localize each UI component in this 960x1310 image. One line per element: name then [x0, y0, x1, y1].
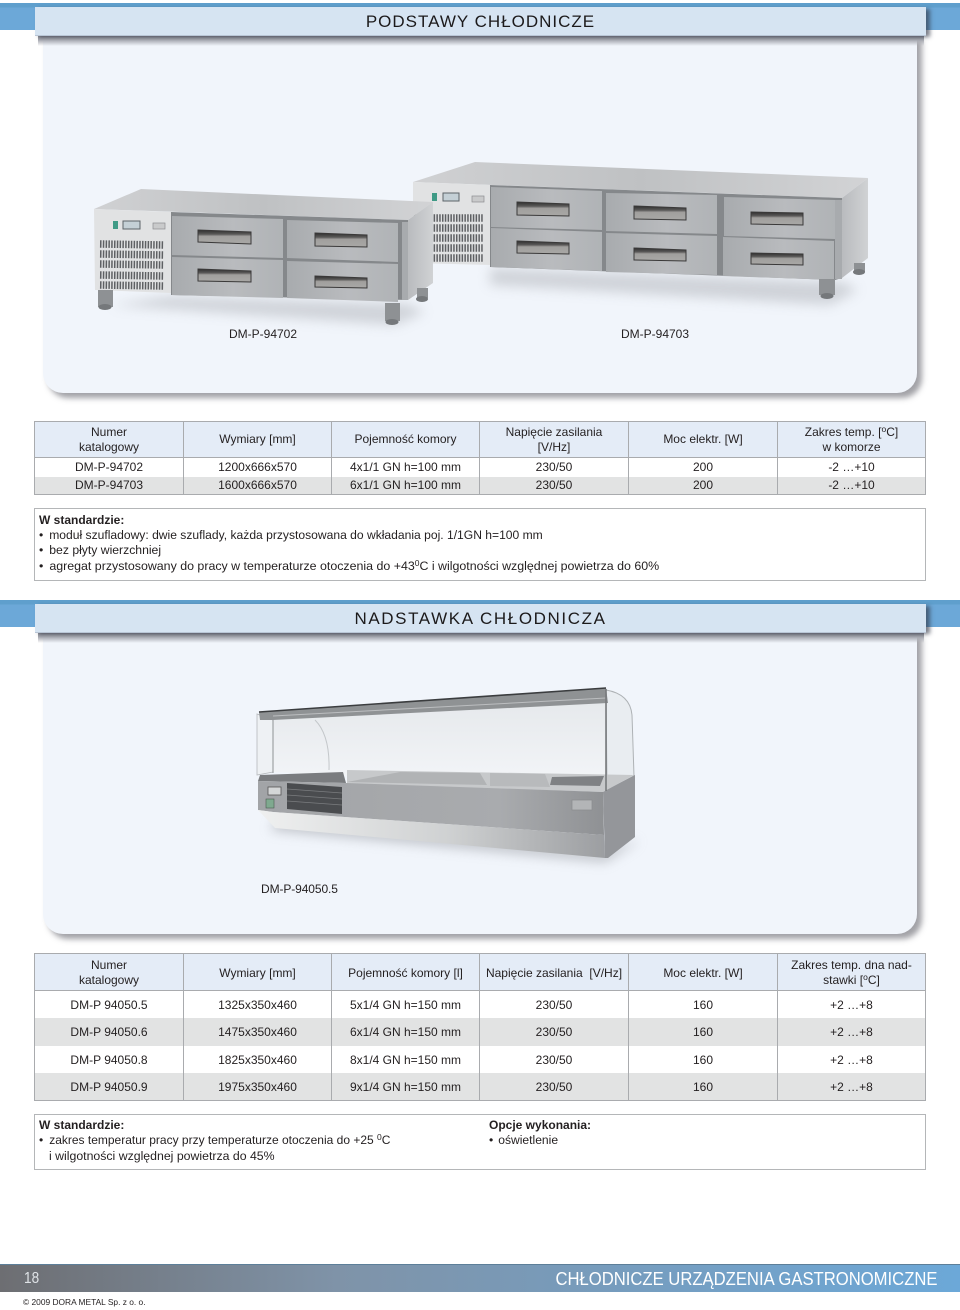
table: nadstawka specification: +2 …+8 [830, 1052, 873, 1066]
table: podstawy specification: 6x1/1 GN h=100 mm [350, 478, 461, 492]
table: nadstawka specification: +2 …+8 [830, 1080, 873, 1094]
title: nadstawka chłodnicza: NADSTAWKA CHŁODNICZA [354, 609, 607, 628]
table: nadstawka specification: DM-P 94050.9 [70, 1080, 148, 1094]
title: podstawy chłodnicze [35, 7, 926, 35]
table: nadstawka specification: +2 …+8 [830, 998, 873, 1012]
text box: W standardzie podstawy: • agregat przystosowany do pracy w temperaturze otoczenia do +430C i wilgotności względnej powietrza do 60% [39, 558, 659, 573]
text box: W standardzie podstawy: • moduł szufladowy: dwie szuflady, każda przystosowana do wkładania poj. 1/1GN h=100 mm [39, 528, 543, 542]
header band: podstawy [0, 3, 960, 30]
table: nadstawka specification: Moc elektr. [W] [663, 966, 743, 980]
table: podstawy specification: 200 [693, 460, 713, 474]
copyright: © 2009 DORA METAL Sp. z o. o. [23, 1297, 146, 1307]
table: nadstawka specification: Numer [91, 958, 127, 972]
table: nadstawka specification: 230/50 [536, 1080, 572, 1094]
table: nadstawka specification: 160 [693, 1025, 713, 1039]
table: nadstawka specification [34, 953, 926, 1101]
text box: W standardzie and Opcje wykonania: Opcje wykonania: [489, 1118, 591, 1132]
table: nadstawka specification: DM-P 94050.5 [70, 998, 148, 1012]
table: nadstawka specification: 230/50 [536, 998, 572, 1012]
table: podstawy specification: w komorze [822, 440, 880, 454]
table: podstawy specification: DM-P-94702 [75, 460, 143, 474]
product image: DM-P-94703 [413, 162, 868, 305]
label: DM-P-94050.5: DM-P-94050.5 [261, 882, 338, 896]
table: nadstawka specification: Pojemność komory [l] [348, 966, 463, 980]
text box: W standardzie and Opcje wykonania: i wilgotności względnej powietrza do 45% [49, 1149, 275, 1163]
panel: product photo background top [43, 35, 917, 393]
table: podstawy specification: Pojemność komory [354, 432, 457, 446]
text box: W standardzie podstawy: • bez płyty wierzchniej [39, 543, 161, 557]
table: nadstawka specification: +2 …+8 [830, 1025, 873, 1039]
table: podstawy specification: 1200x666x570 [218, 460, 297, 474]
footer band [0, 1264, 960, 1292]
header shadow top [38, 35, 924, 46]
text box: W standardzie and Opcje wykonania: W standardzie: [39, 1118, 124, 1132]
product image: DM-P-94050.5 display [257, 688, 640, 862]
table: podstawy specification [34, 421, 926, 495]
table: podstawy specification: [V/Hz] [538, 440, 570, 454]
header band: nadstawka [0, 600, 960, 627]
table: podstawy specification: Zakres temp. [oC] [805, 424, 898, 438]
table: nadstawka specification: 1975x350x460 [218, 1080, 297, 1094]
table: nadstawka specification: 1325x350x460 [218, 998, 297, 1012]
table: nadstawka specification: 160 [693, 1080, 713, 1094]
table: podstawy specification: 230/50 [536, 478, 572, 492]
table: podstawy specification: DM-P-94703 [75, 478, 143, 492]
table: podstawy specification: 4x1/1 GN h=100 mm [350, 460, 461, 474]
panel: product photo background bottom [43, 632, 917, 934]
label: DM-P-94702: DM-P-94702 [229, 327, 297, 341]
table: podstawy specification: katalogowy [79, 440, 139, 454]
table: podstawy specification: Moc elektr. [W] [663, 432, 743, 446]
table: nadstawka specification: 1825x350x460 [218, 1052, 297, 1066]
table: nadstawka specification: 160 [693, 1052, 713, 1066]
header shadow bottom [38, 632, 924, 643]
text box: W standardzie and Opcje wykonania [34, 1114, 926, 1170]
table: podstawy specification: -2 …+10 [828, 478, 875, 492]
text box: W standardzie podstawy [34, 508, 926, 581]
table: podstawy specification: Wymiary [mm] [219, 432, 296, 446]
table: nadstawka specification: Wymiary [mm] [219, 966, 296, 980]
table: podstawy specification: 200 [693, 478, 713, 492]
table: nadstawka specification: DM-P 94050.6 [70, 1025, 148, 1039]
footer title: CHŁODNICZE URZĄDZENIA GASTRONOMICZNE [555, 1268, 937, 1289]
table: podstawy specification: -2 …+10 [828, 460, 875, 474]
table: nadstawka specification: 230/50 [536, 1052, 572, 1066]
table: nadstawka specification: 1475x350x460 [218, 1025, 297, 1039]
table: nadstawka specification: DM-P 94050.8 [70, 1052, 148, 1066]
table: podstawy specification: Numer [91, 424, 127, 438]
table: nadstawka specification: 160 [693, 998, 713, 1012]
table: nadstawka specification: 9x1/4 GN h=150 mm [350, 1080, 461, 1094]
text box: W standardzie and Opcje wykonania: • zakres temperatur pracy przy temperaturze otoczenia do +25 0C [39, 1132, 390, 1147]
table: podstawy specification: 230/50 [536, 460, 572, 474]
page number: 18 [24, 1270, 39, 1287]
text box: W standardzie podstawy: W standardzie: [39, 513, 124, 527]
table: nadstawka specification: Zakres temp. dna nad- [791, 958, 912, 972]
table: nadstawka specification: 5x1/4 GN h=150 mm [350, 998, 461, 1012]
title: nadstawka chłodnicza [35, 604, 926, 632]
table: nadstawka specification: stawki [oC] [823, 972, 880, 987]
title: podstawy chłodnicze: PODSTAWY CHŁODNICZE [366, 12, 595, 31]
text box: W standardzie and Opcje wykonania: • oświetlenie [489, 1133, 558, 1147]
table: podstawy specification: 1600x666x570 [218, 478, 297, 492]
table: nadstawka specification: 6x1/4 GN h=150 mm [350, 1025, 461, 1039]
product image: DM-P-94702 [94, 189, 433, 325]
table: nadstawka specification: katalogowy [79, 973, 139, 987]
table: nadstawka specification: 8x1/4 GN h=150 mm [350, 1052, 461, 1066]
table: nadstawka specification: 230/50 [536, 1025, 572, 1039]
label: DM-P-94703: DM-P-94703 [621, 327, 689, 341]
table: podstawy specification: Napięcie zasilania [506, 424, 602, 438]
table: nadstawka specification: Napięcie zasilania [V/Hz] [486, 966, 622, 980]
